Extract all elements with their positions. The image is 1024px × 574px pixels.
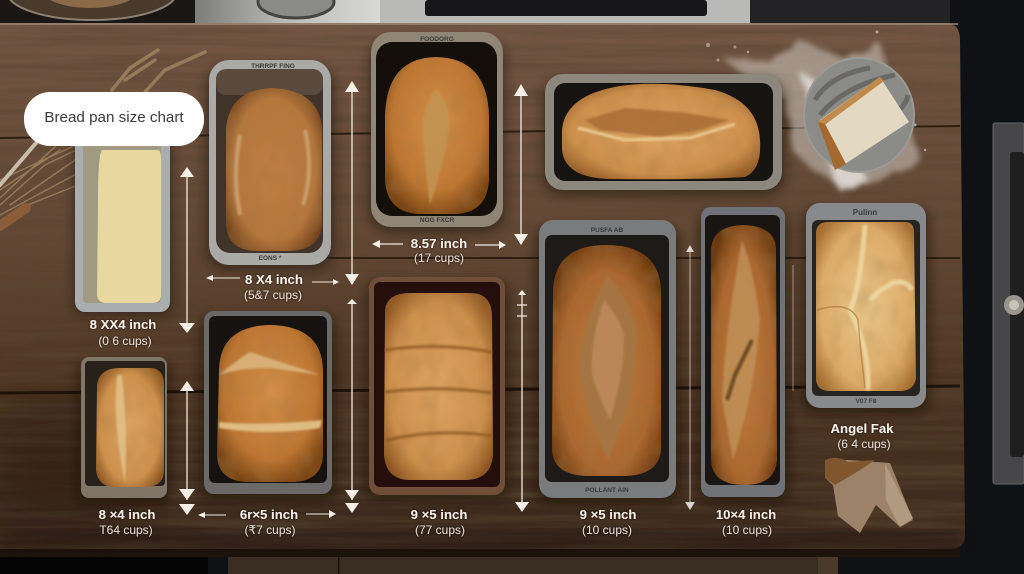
- arrow: lower horizontal right: [306, 510, 336, 518]
- label: 8x4 raw: (0 6 cups): [98, 334, 152, 348]
- arrow: second horizontal right: [312, 279, 339, 285]
- arrow: middle column vertical lower: [345, 299, 359, 513]
- pan: angel food: V07 F8: [856, 398, 877, 405]
- loaf: [226, 88, 322, 251]
- arrow: third column vertical upper: [514, 84, 528, 245]
- arrow: middle column vertical upper: [345, 81, 359, 285]
- label: small left: 8 ×4 inch: [99, 507, 155, 522]
- pan: tall bronze: FOODORG: [420, 36, 454, 43]
- label: 9x5 long: [580, 507, 636, 537]
- appliance at right: [993, 123, 1024, 484]
- plate with bread slice: [804, 58, 914, 172]
- arrow: lower horizontal left: [198, 512, 226, 518]
- label: 9x5 copper: (77 cups): [415, 523, 465, 537]
- arrow: top horizontal right: [475, 241, 506, 249]
- arrow: narrow pan line: [792, 265, 794, 391]
- label: 10x4: (10 cups): [722, 523, 772, 537]
- label: small left: T64 cups): [99, 523, 153, 537]
- pan: 9x5 long: [535, 220, 680, 504]
- pan: 8x4 lighter grey: [205, 60, 335, 270]
- pan: angel food: Pulinn: [853, 208, 877, 217]
- pan: angel food: [802, 203, 930, 414]
- pan: 9x5 long: PUSFA AB: [591, 227, 623, 234]
- label: 8x4 raw: 8 XX4 inch: [90, 317, 156, 332]
- label: 6x5: 6r×5 inch: [240, 507, 298, 522]
- loaf: [96, 368, 164, 487]
- arrow: second horizontal left: [206, 275, 240, 281]
- pan: 10x4 narrow: [698, 207, 789, 502]
- loaf: [552, 245, 661, 476]
- arrow: small pan vertical lower: [179, 381, 195, 515]
- label: 8x4 grey: [244, 272, 303, 302]
- label: 6x5: [240, 507, 298, 537]
- label: 8x4 raw: [90, 317, 156, 348]
- loaf: [816, 222, 916, 391]
- pan: 8x4 lighter grey: THRRPF FING: [251, 63, 295, 70]
- label: 10x4: [716, 507, 776, 537]
- pan: 9x5 long: POLLANT AIN: [585, 487, 629, 494]
- label: 8.5 tall: 8.57 inch: [411, 236, 467, 251]
- loaf: [217, 325, 323, 482]
- loaf: [711, 225, 777, 485]
- label: 8.5 tall: [411, 236, 467, 265]
- pan: horizontal: [542, 74, 786, 196]
- arrow: small pan vertical upper: [179, 167, 195, 333]
- arrow: long pan vertical: [685, 245, 695, 510]
- loaf: [385, 57, 489, 214]
- label: angel food: Angel Fak: [830, 421, 894, 436]
- label: 9x5 long: 9 ×5 inch: [580, 507, 636, 522]
- label: 9x5 copper: [411, 507, 467, 537]
- pan: dark medium: [200, 311, 336, 500]
- label: 6x5: (₹7 cups): [245, 523, 295, 537]
- title pill: Bread pan size chart: [44, 109, 184, 126]
- label: 8x4 grey: (5&7 cups): [244, 288, 302, 302]
- label: small left: [99, 507, 155, 537]
- dimension arrows: [179, 81, 793, 518]
- label: 9x5 copper: 9 ×5 inch: [411, 507, 467, 522]
- wheat and whisk decoration: [0, 50, 205, 226]
- label: angel food: (6 4 cups): [837, 437, 891, 451]
- pan: small left: [78, 357, 170, 504]
- label: 8x4 grey: 8 X4 inch: [245, 272, 303, 287]
- pan: tall bronze: [368, 32, 506, 233]
- bread slice: [818, 77, 909, 170]
- dough: [97, 150, 161, 303]
- arrow: third column vertical lower: [515, 290, 529, 512]
- torn bread slices: [825, 458, 913, 533]
- size labels: [90, 236, 894, 537]
- label: 10x4: 10×4 inch: [716, 507, 776, 522]
- pan: 8x4 lighter grey: EONS *: [259, 255, 282, 262]
- title pill: [24, 92, 204, 146]
- loaf: [562, 84, 760, 179]
- arrow: top horizontal left: [372, 240, 403, 248]
- flour spill: [706, 30, 926, 190]
- loaf: [384, 293, 493, 480]
- label: 8.5 tall: (17 cups): [414, 251, 464, 265]
- label: 9x5 long: (10 cups): [582, 523, 632, 537]
- pan: 8x4 raw dough: [73, 125, 173, 315]
- pan: tall bronze: NOG FXCR: [420, 217, 454, 224]
- pan: rustic copper: [366, 277, 509, 500]
- label: angel food: [830, 421, 894, 451]
